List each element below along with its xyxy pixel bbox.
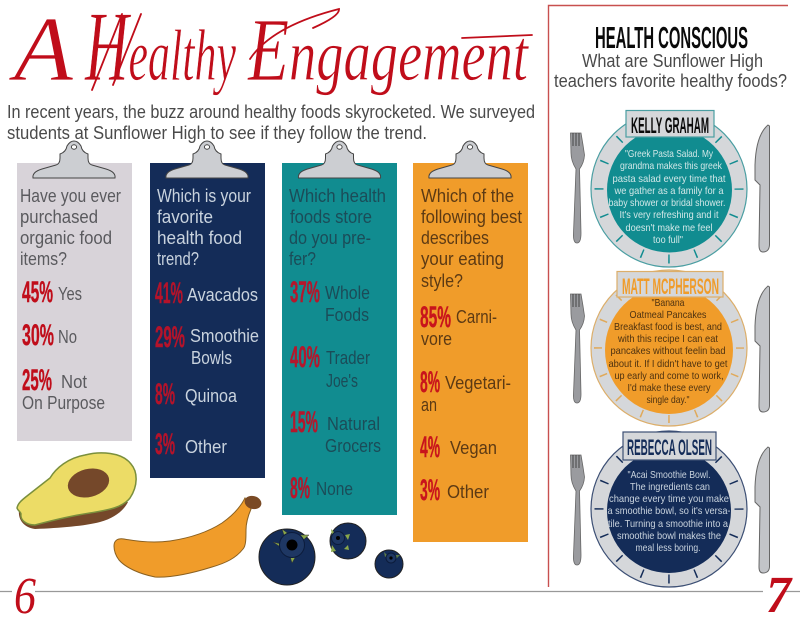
intro text [7, 102, 535, 143]
panel: Kelly Graham plate [570, 110, 770, 267]
quote: It's very refreshing and it [620, 209, 719, 221]
question: following best [421, 207, 522, 227]
question [421, 186, 522, 291]
quote: baby shower or bridal shower. [608, 197, 726, 209]
icon: clipboard clip [429, 141, 511, 178]
question [289, 186, 386, 269]
intro text: In recent years, the buzz around healthy foods skyrocketed. We surveyed [7, 102, 535, 122]
icon: fork [570, 133, 584, 243]
question: foods store [290, 207, 372, 227]
answers: Trader [326, 348, 370, 368]
answers: 8% [420, 366, 440, 399]
quote: up early and come to work, [614, 370, 724, 382]
icon: knife [755, 286, 770, 412]
answers: 25% [22, 364, 52, 397]
intro text: students at Sunflower High to see if they follow the trend. [7, 123, 427, 143]
answers: 37% [290, 276, 320, 309]
quote: about it. If I didn't have to get [608, 358, 728, 370]
answers: Vegan [450, 438, 497, 458]
quote: change every time you make [609, 493, 729, 505]
answers: Not [61, 372, 87, 392]
panel: eating style [413, 141, 528, 542]
quote: "Greek Pasta Salad. My [625, 148, 714, 160]
panel: favorite health food trend [150, 141, 265, 478]
question: purchased [20, 207, 98, 227]
quote: smoothie bowl makes the [617, 530, 721, 542]
answers: 40% [290, 341, 320, 374]
quote: we gather as a family for a [614, 185, 724, 197]
answers: 3% [155, 428, 175, 461]
panel: Matt McPherson plate [570, 270, 770, 426]
red sidebar border [548, 6, 788, 587]
answers: Joe's [326, 371, 358, 391]
question: describes [421, 228, 489, 248]
answers: Yes [58, 284, 82, 304]
quote: "Banana [652, 297, 685, 309]
answers: 29% [155, 321, 185, 354]
icon: avocado [17, 453, 136, 529]
quote: tile. Turning a smoothie into a [608, 518, 728, 530]
answers: Smoothie [190, 326, 259, 346]
answers: On Purpose [22, 393, 105, 413]
plate [591, 431, 747, 587]
answers: 45% [22, 276, 53, 309]
subheading [554, 51, 787, 91]
icon: clipboard clip [298, 141, 381, 178]
panel: organic food survey [17, 141, 132, 441]
question [157, 186, 251, 269]
answers: an [421, 395, 437, 415]
icon: knife [755, 125, 770, 252]
answers: 8% [155, 378, 175, 411]
answers: 41% [155, 277, 183, 310]
quote: Oatmeal Pancakes [630, 309, 706, 321]
plate [591, 111, 747, 267]
answers: Avacados [187, 285, 258, 305]
question: health food [157, 228, 242, 248]
panel: Rebecca Olsen plate [570, 431, 770, 587]
question: organic food [20, 228, 112, 248]
quote: pasta salad every time that [612, 173, 726, 185]
answers: 8% [290, 472, 310, 505]
question: Which is your [157, 186, 251, 206]
title: A Healthy Engagement: A [8, 0, 74, 100]
question: fer? [289, 249, 316, 269]
answers: Other [447, 482, 489, 502]
quote: single day." [646, 394, 690, 406]
quote: with this recipe I can eat [617, 333, 718, 345]
icon: clipboard clip [166, 141, 248, 178]
question: style? [421, 271, 463, 291]
name tag [617, 272, 723, 299]
icon: fork [570, 294, 584, 403]
question: do you pre- [289, 228, 371, 248]
answers: Carni- [456, 307, 497, 327]
question: trend? [157, 249, 199, 269]
answers: No [58, 327, 77, 347]
quote: grandma makes this greek [620, 160, 723, 172]
quote: meal less boring. [636, 542, 700, 554]
answers: 85% [420, 301, 451, 334]
answers [290, 276, 381, 505]
quote: too full" [653, 234, 683, 246]
quote: a smoothie bowl, so it's versa- [608, 505, 731, 517]
question: Which health [289, 186, 386, 206]
title: A Healthy Engagement [8, 0, 532, 102]
answers: None [316, 479, 353, 499]
name tag [626, 110, 714, 138]
subheading: What are Sunflower High [582, 51, 763, 71]
quote: "Acai Smoothie Bowl. [628, 469, 710, 481]
answers: 4% [420, 431, 440, 464]
quote [608, 469, 731, 554]
question: your eating [421, 249, 504, 269]
quote: The ingredients can [630, 481, 710, 493]
answers: 3% [420, 474, 440, 507]
answers: Vegetari- [445, 373, 511, 393]
answers: 15% [290, 406, 318, 439]
answers: Grocers [325, 436, 381, 456]
answers [420, 301, 511, 507]
quote [608, 297, 728, 406]
panel: preferred health foods store [282, 141, 397, 515]
icon: fork [570, 455, 584, 565]
question: items? [20, 249, 67, 269]
quote: I'd make these every [628, 382, 711, 394]
plate [591, 270, 747, 426]
name tag [623, 432, 716, 460]
quote: doesn't make me feel [626, 222, 712, 234]
answers: 30% [22, 319, 54, 352]
answers: Whole [325, 283, 370, 303]
answers: Quinoa [185, 386, 238, 406]
question: Which of the [421, 186, 514, 206]
icon: banana [114, 494, 263, 577]
question: favorite [157, 207, 213, 227]
answers: Bowls [191, 348, 232, 368]
icon: clipboard clip [33, 141, 115, 178]
question: Have you ever [20, 186, 121, 206]
question [20, 186, 121, 269]
answers: Foods [325, 305, 369, 325]
answers: vore [421, 329, 452, 349]
quote: Breakfast food is best, and [614, 321, 722, 333]
quote: pancakes without feelin bad [610, 345, 726, 357]
answers: Natural [327, 414, 380, 434]
quote [608, 148, 726, 246]
answers [22, 276, 105, 413]
icon: blueberries [259, 523, 403, 585]
answers: Other [185, 437, 227, 457]
answers [155, 277, 259, 461]
title: A Healthy Engagement: Engagement [247, 1, 529, 100]
icon: knife [755, 447, 770, 573]
